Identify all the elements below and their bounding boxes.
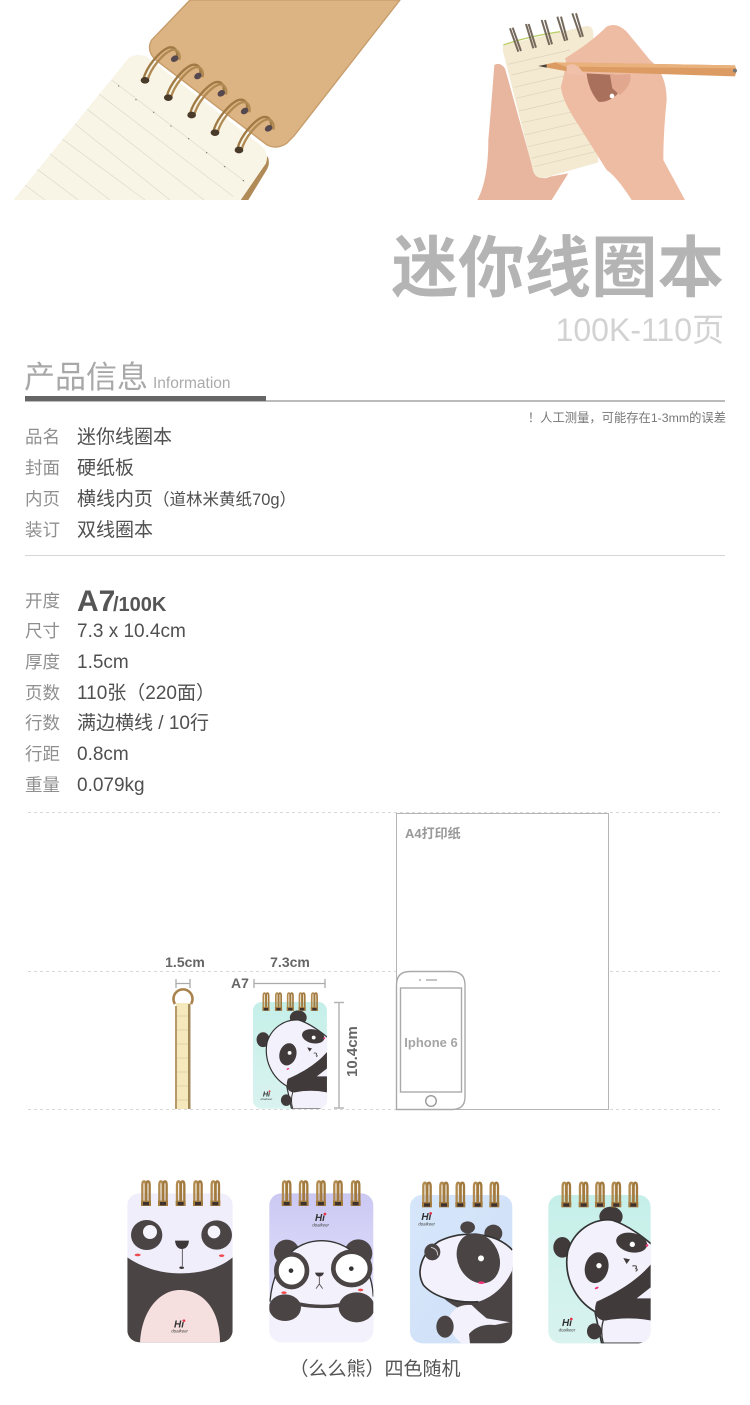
spec list: dimensions: 开度	[25, 591, 60, 611]
small notebook: front view to scale	[253, 993, 332, 1109]
photo: hands writing in notebook with pencil	[477, 13, 737, 200]
spec list: dimensions: 7.3 x 10.4cm	[77, 621, 186, 642]
spec list: dimensions	[25, 585, 215, 796]
spec list: dimensions: 行数	[25, 713, 60, 733]
subtitle: 100K-110页	[556, 312, 724, 348]
notebook: panda with big round eyes: doaikeer	[312, 1223, 330, 1228]
notebook: panda in profile: Hi	[421, 1212, 432, 1223]
notebook: panda in profile	[410, 1183, 512, 1343]
spec list: dimensions: 0.079kg	[77, 775, 145, 796]
spec list: basic info: 横线内页（道林米黄纸70g）	[77, 488, 296, 510]
spec list: basic info: 迷你线圈本	[77, 426, 172, 448]
spec list: dimensions: 行距	[25, 744, 60, 764]
spec list: dimensions: 110张（220面）	[77, 682, 215, 704]
spec list: dimensions: 1.5cm	[77, 652, 129, 673]
spec list: dimensions: /100K	[113, 594, 167, 616]
width measure: A7 7.3cm	[231, 954, 325, 991]
size comparison: A4 paper: A4打印纸	[405, 826, 461, 841]
spec list: basic info: 内页	[25, 489, 60, 509]
size comparison: iPhone 6: Iphone 6	[404, 1035, 458, 1050]
title: 迷你线圈本	[392, 232, 724, 306]
size comparison: A4 paper	[396, 814, 608, 1110]
spec list: dimensions: 0.8cm	[77, 744, 129, 765]
spec list: basic info: 封面	[25, 458, 60, 478]
height measure: 10.4cm	[334, 1002, 361, 1108]
caption: （么么熊）四色随机	[289, 1358, 461, 1380]
notebook: panda in profile: doaikeer	[418, 1222, 436, 1227]
note: measurement tolerance: ！人工测量，可能存在1-3mm的误差	[528, 410, 726, 425]
spec list: dimensions: 厚度	[25, 652, 60, 672]
notebook: panda peeking from the side	[548, 1183, 658, 1343]
heading: product information: 产品信息	[24, 360, 148, 395]
notebook: panda with big round eyes: Hi	[315, 1213, 325, 1224]
spec list: basic info: 双线圈本	[77, 519, 153, 541]
spec list: dimensions: 重量	[25, 775, 60, 795]
photo: open notebook with kraft cover	[13, 0, 400, 200]
spec list: basic info: 品名	[25, 427, 60, 447]
notebook: panda with big round eyes	[269, 1181, 375, 1342]
spec list: dimensions: 尺寸	[25, 621, 60, 641]
height measure: 10.4cm: 10.4cm	[344, 1026, 361, 1077]
width measure: A7 7.3cm: 7.3cm	[270, 954, 310, 970]
thickness measure: 1.5cm spine view	[165, 954, 205, 1109]
spec list: basic info: 硬纸板	[77, 457, 134, 479]
spec list: basic info	[25, 426, 296, 541]
spec list: basic info: 装订	[25, 520, 60, 540]
heading: product information: Information	[153, 375, 231, 392]
width measure: A7 7.3cm: A7	[231, 975, 249, 991]
notebook: full panda face: Hi	[174, 1320, 184, 1331]
notebook: full panda face	[127, 1181, 233, 1342]
spec list: dimensions: A7	[77, 585, 115, 618]
spec list: dimensions: 满边横线 / 10行	[77, 712, 209, 734]
spec list: dimensions: 页数	[25, 683, 60, 703]
heading: product information	[24, 360, 725, 402]
notebook: full panda face: doaikeer	[171, 1329, 189, 1334]
size comparison: iPhone 6	[396, 972, 465, 1110]
thickness measure: 1.5cm spine view: 1.5cm	[165, 954, 205, 970]
